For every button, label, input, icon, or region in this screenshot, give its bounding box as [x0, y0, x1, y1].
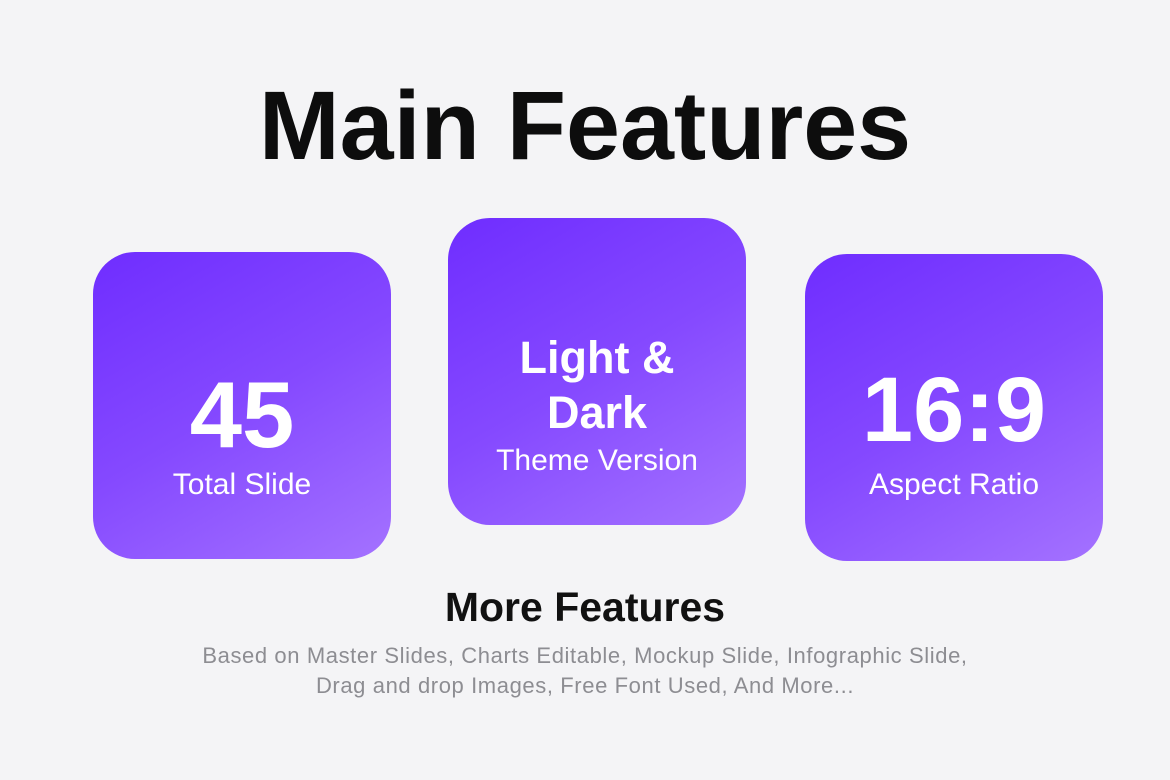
subheading more features: More Features [445, 584, 725, 630]
title: Main Features [259, 71, 911, 180]
number 45: 45 [190, 362, 294, 467]
heading light & dark: Dark [547, 387, 647, 438]
card: light & dark [448, 218, 746, 525]
feature list text: Based on Master Slides, Charts Editable, Mockup Slide, Infographic Slide, [202, 643, 968, 668]
card: aspect ratio [805, 254, 1103, 561]
label aspect ratio: Aspect Ratio [869, 468, 1039, 501]
label total slide: Total Slide [173, 468, 311, 501]
number 16:9: 16:9 [862, 359, 1046, 461]
card: total slide [93, 252, 391, 559]
heading light & dark: Light & [520, 332, 674, 383]
heading light & dark [520, 332, 674, 438]
feature list text: Drag and drop Images, Free Font Used, And More... [316, 673, 854, 698]
label theme version: Theme Version [496, 444, 698, 477]
feature list text [202, 643, 968, 698]
